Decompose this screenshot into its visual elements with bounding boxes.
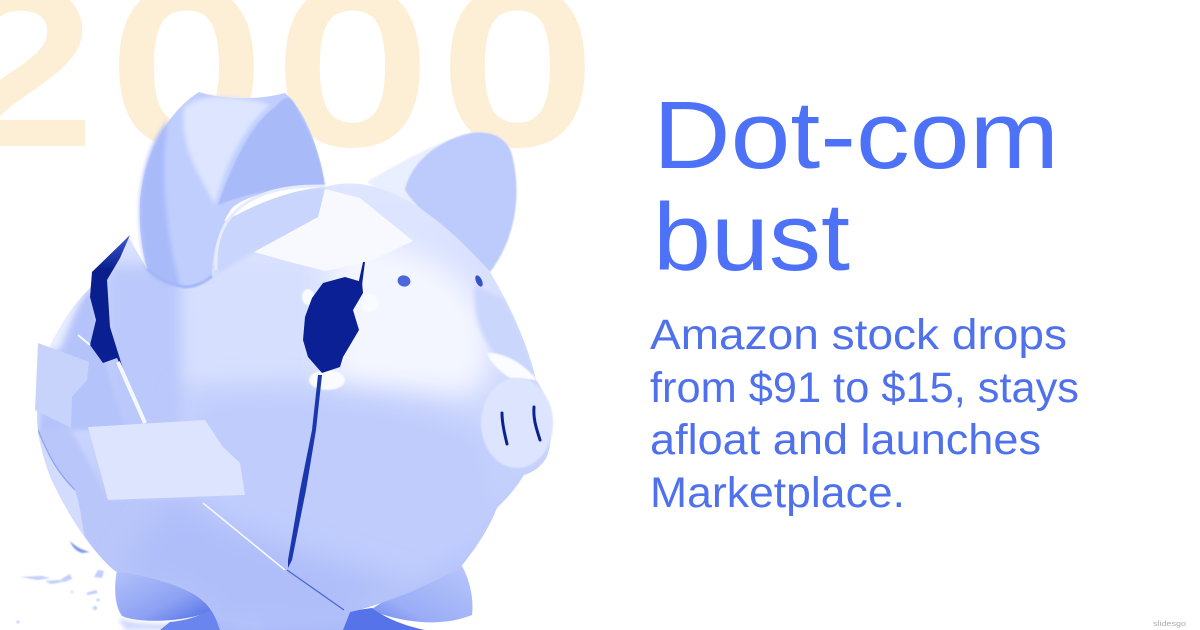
description text: afloat and launches — [650, 416, 1041, 464]
icon: far ear — [367, 132, 516, 272]
icon: eyes — [396, 274, 484, 288]
icon: dark vertical crack — [288, 375, 322, 568]
icon: tape on left side — [35, 343, 89, 428]
icon: pig body — [37, 183, 551, 630]
icon: shadow between feet — [342, 608, 425, 630]
watermark: slidesgo — [1153, 621, 1186, 628]
icon: floor debris — [16, 541, 104, 624]
year 2000 background numeral — [0, 0, 589, 187]
icon: left foot — [115, 570, 212, 621]
icon: white cracks — [78, 335, 344, 610]
title: bust — [653, 184, 850, 291]
icon: right foot — [370, 566, 473, 622]
icon: snout — [481, 378, 553, 468]
piggy bank illustration — [16, 92, 553, 630]
icon: left hole — [90, 235, 130, 372]
icon: tape on head — [254, 189, 413, 271]
title — [653, 82, 1059, 291]
icon: hole in pig head — [302, 262, 379, 390]
description text: from $91 to $15, stays — [650, 364, 1079, 412]
icon: tape on lower body — [88, 420, 245, 500]
icon: floor shadow — [118, 612, 224, 630]
title: Dot-com — [653, 82, 1059, 189]
icon: head arc rim — [216, 186, 325, 270]
icon: body shading — [30, 186, 537, 630]
description text: Amazon stock drops — [650, 311, 1067, 359]
description text: Marketplace. — [650, 469, 905, 517]
icon: near ear — [140, 92, 325, 287]
description text — [650, 311, 1079, 517]
